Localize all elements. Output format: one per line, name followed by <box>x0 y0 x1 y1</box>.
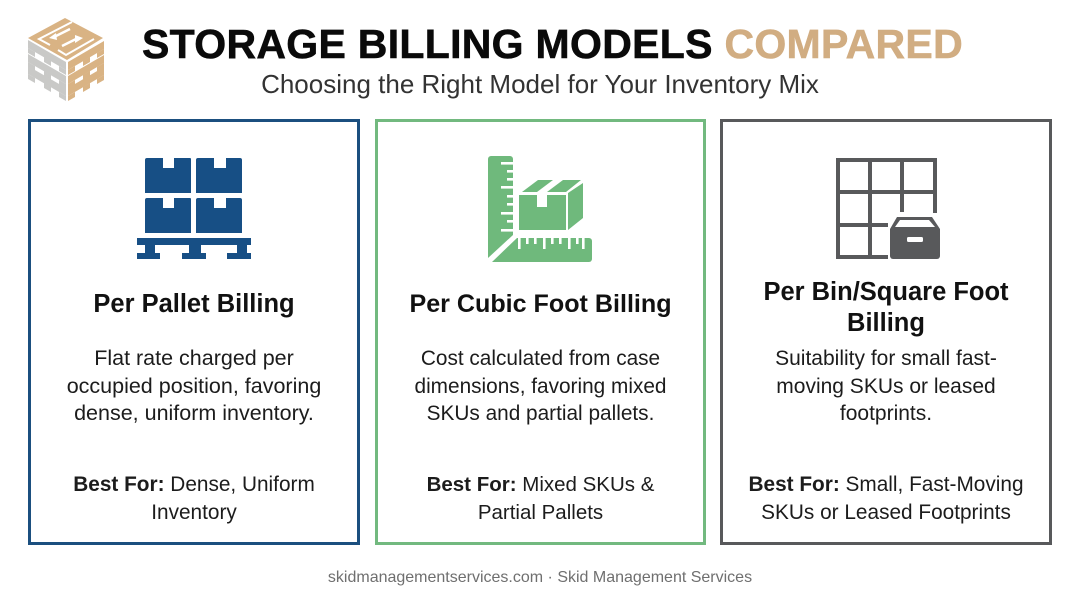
best for <box>73 473 315 524</box>
panel: per pallet billing <box>28 119 360 545</box>
best for: Inventory <box>151 501 237 524</box>
best for: Partial Pallets <box>478 501 603 524</box>
best for: SKUs or Leased Footprints <box>761 501 1011 524</box>
description: SKUs and partial pallets. <box>427 402 654 425</box>
description: occupied position, favoring <box>67 374 321 398</box>
panel: per cubic foot billing <box>375 119 706 545</box>
best for: Best For: Mixed SKUs & <box>427 473 654 496</box>
description: Cost calculated from case <box>421 347 660 370</box>
best for: Best For: Dense, Uniform <box>73 473 315 496</box>
description: dense, uniform inventory. <box>74 401 314 425</box>
panel: per bin/square foot billing <box>720 119 1052 545</box>
best for: Best For: Small, Fast-Moving <box>748 473 1024 496</box>
description: Flat rate charged per <box>94 346 294 370</box>
footer: skidmanagementservices.com · Skid Management Services <box>328 569 752 586</box>
best for <box>748 473 1024 524</box>
description: moving SKUs or leased <box>776 375 996 398</box>
subtitle: Choosing the Right Model for Your Inventory Mix <box>261 69 819 99</box>
description <box>414 347 666 425</box>
icon: boxes on pallet <box>137 158 251 259</box>
heading: Per Cubic Foot Billing <box>409 290 672 318</box>
description: footprints. <box>840 402 932 425</box>
icon: grid with bin <box>836 158 940 259</box>
heading: Per Bin/Square Foot <box>763 278 1009 306</box>
title: STORAGE BILLING MODELS COMPARED <box>142 21 963 67</box>
description <box>775 347 997 425</box>
icon: ruler and box <box>488 156 592 262</box>
best for <box>427 473 654 524</box>
logo <box>28 18 104 101</box>
description: dimensions, favoring mixed <box>414 375 666 398</box>
heading: Per Pallet Billing <box>93 290 295 318</box>
description: Suitability for small fast- <box>775 347 997 370</box>
heading <box>763 278 1009 337</box>
heading: Billing <box>847 309 925 337</box>
description <box>67 346 321 425</box>
